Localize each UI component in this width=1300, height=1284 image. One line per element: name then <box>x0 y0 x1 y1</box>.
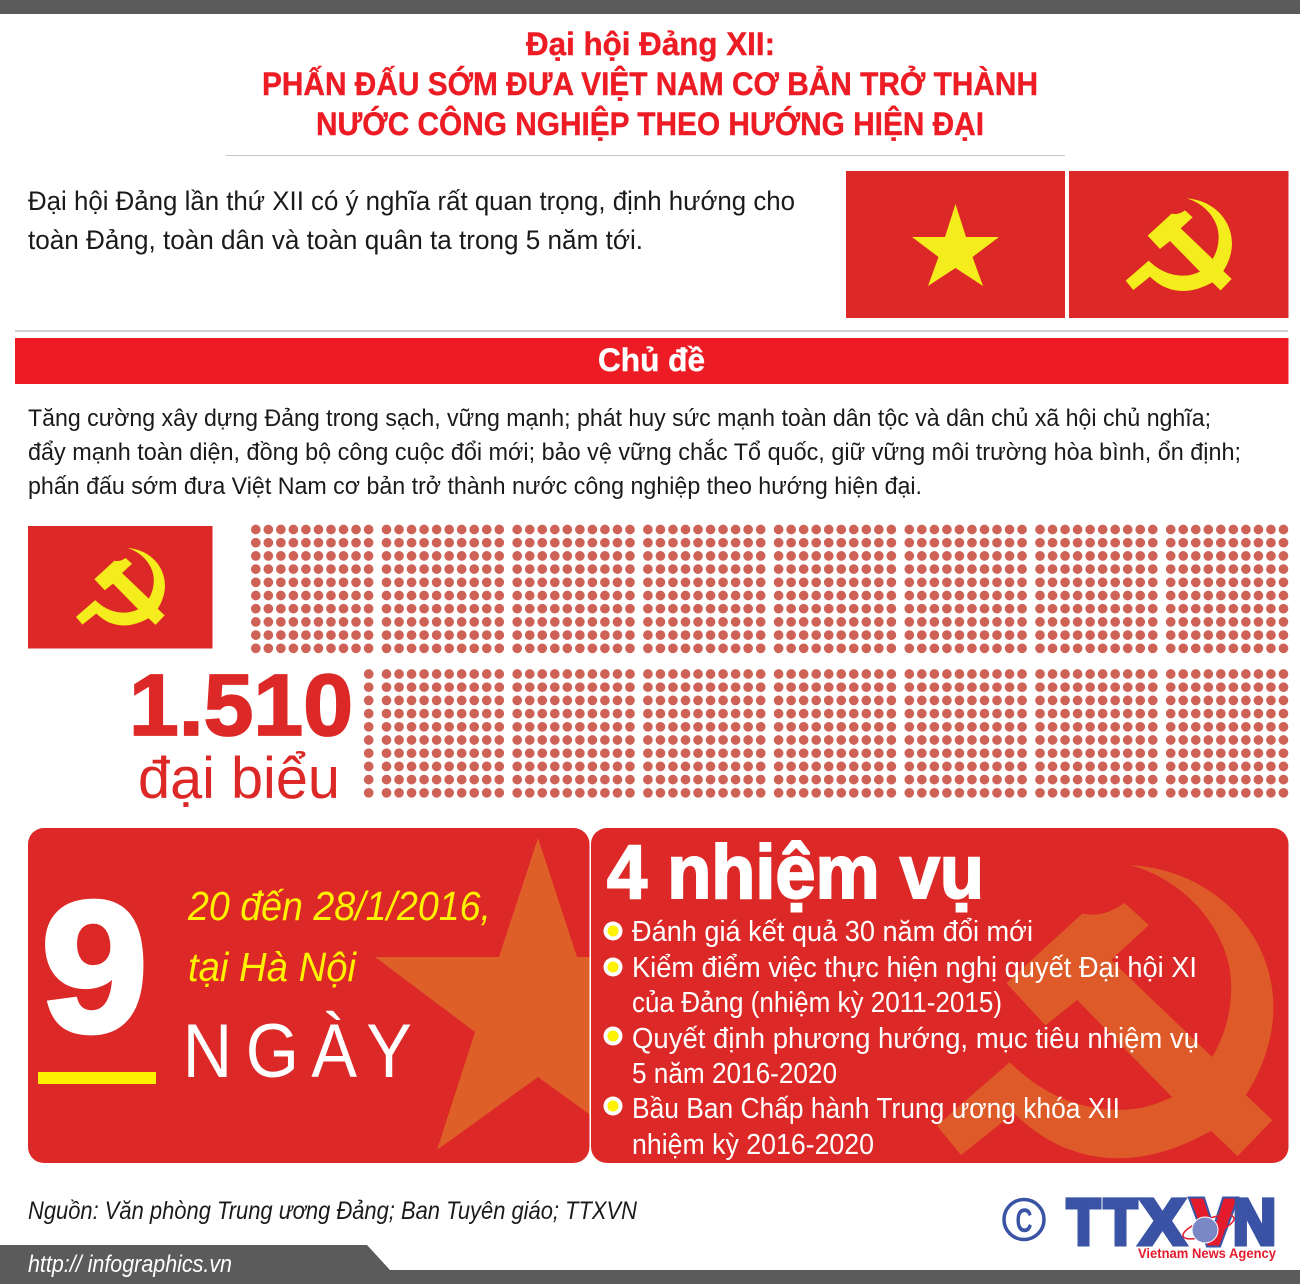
title <box>262 26 1038 142</box>
number 9: 9 <box>41 864 148 1071</box>
panel: 9 days <box>28 828 590 1163</box>
intro text: toàn Đảng, toàn dân và toàn quân ta trong 5 năm tới. <box>28 225 643 255</box>
theme text <box>28 405 1241 500</box>
icon: watermark hammer and sickle <box>937 865 1273 1158</box>
heading: 4 tasks: 4 nhiệm vụ <box>607 830 984 915</box>
delegate count: 1.510 <box>129 657 353 754</box>
theme text: đẩy mạnh toàn diện, đồng bộ công cuộc đổi mới; bảo vệ vững chắc Tổ quốc, giữ vững môi trường hòa bình, ổn định; <box>28 439 1241 466</box>
delegate count <box>129 657 353 811</box>
logo: TTXVN: V <box>1192 1186 1235 1258</box>
logo: TTXVN: T <box>1104 1186 1137 1258</box>
title: NƯỚC CÔNG NGHIỆP THEO HƯỚNG HIỆN ĐẠI <box>316 106 984 142</box>
task list: Bầu Ban Chấp hành Trung ương khóa XII <box>632 1093 1120 1125</box>
intro text <box>28 186 795 255</box>
icon: copyright <box>1004 1200 1044 1240</box>
task list: Kiểm điểm việc thực hiện nghị quyết Đại hội XI <box>632 952 1197 984</box>
delegate count: đại biểu <box>138 746 340 811</box>
label: days: NGÀY <box>183 1010 412 1094</box>
theme heading band <box>15 338 1288 384</box>
delegate dots chart <box>256 530 1284 793</box>
task list: Quyết định phương hướng, mục tiêu nhiệm vụ <box>632 1023 1199 1055</box>
dates and place <box>187 883 491 990</box>
title: PHẤN ĐẤU SỚM ĐƯA VIỆT NAM CƠ BẢN TRỞ THÀNH <box>262 66 1038 102</box>
theme heading band: Chủ đề <box>598 342 705 378</box>
party flag <box>28 526 212 648</box>
dates and place: tại Hà Nội <box>188 944 358 990</box>
icon: copyright: C <box>1016 1202 1032 1240</box>
footer bar <box>0 1245 1300 1284</box>
panel: 4 tasks <box>591 828 1288 1163</box>
source: Nguồn: Văn phòng Trung ương Đảng; Ban Tuyên giáo; TTXVN <box>28 1197 638 1225</box>
yellow underline <box>38 1072 156 1084</box>
task list: 5 năm 2016-2020 <box>632 1058 837 1090</box>
icon: watermark star <box>375 838 590 1150</box>
title: Đại hội Đảng XII: <box>526 26 775 62</box>
top bar <box>0 0 1300 14</box>
theme text: phấn đấu sớm đưa Việt Nam cơ bản trở thành nước công nghiệp theo hướng hiện đại. <box>28 473 922 500</box>
task list <box>632 916 1199 1161</box>
task bullets <box>604 922 622 1116</box>
intro text: Đại hội Đảng lần thứ XII có ý nghĩa rất quan trọng, định hướng cho <box>28 186 795 216</box>
task list: của Đảng (nhiệm kỳ 2011-2015) <box>632 987 1002 1019</box>
flag: star <box>846 171 1065 318</box>
logo: TTXVN: V <box>1192 1186 1235 1258</box>
logo: TTXVN: N <box>1233 1186 1276 1258</box>
logo: TTXVN <box>1067 1186 1276 1261</box>
task list: nhiệm kỳ 2016-2020 <box>632 1129 874 1161</box>
dates and place: 20 đến 28/1/2016, <box>187 883 491 929</box>
task list: Đánh giá kết quả 30 năm đổi mới <box>632 916 1033 948</box>
logo: TTXVN: X <box>1140 1186 1185 1258</box>
flag: hammer and sickle <box>1069 171 1288 318</box>
website url: http:// infographics.vn <box>28 1251 232 1278</box>
theme text: Tăng cường xây dựng Đảng trong sạch, vững mạnh; phát huy sức mạnh toàn dân tộc và dân chủ xã hội chủ nghĩa; <box>28 405 1211 432</box>
logo: TTXVN: Vietnam News Agency <box>1138 1246 1276 1261</box>
logo: TTXVN: T <box>1067 1186 1100 1258</box>
